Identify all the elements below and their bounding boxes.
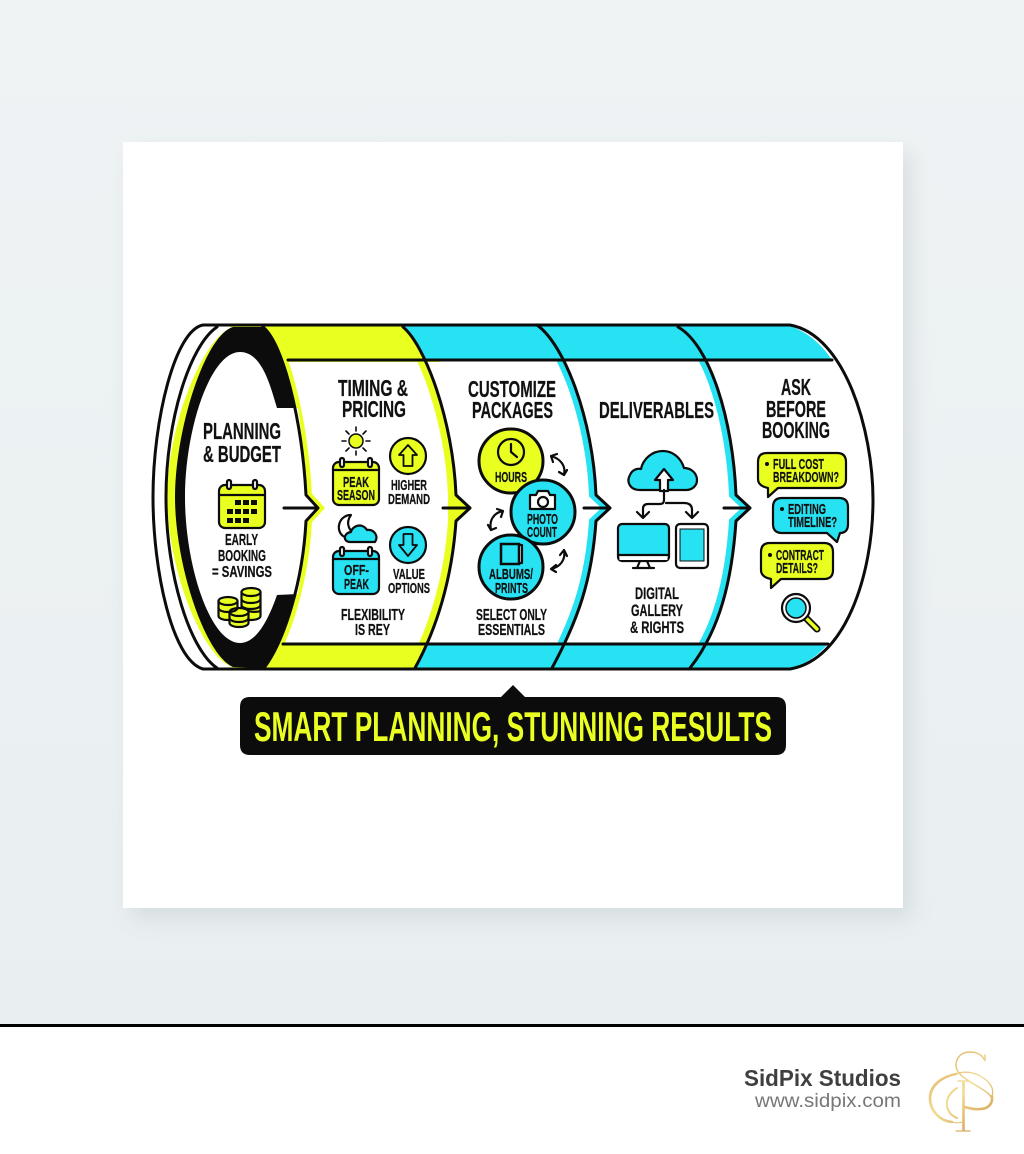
text: select only essentials: [476, 607, 547, 639]
heading: [203, 418, 281, 467]
icon: calendar: [219, 480, 265, 528]
panel: ask before booking: [758, 374, 848, 629]
text: flexibility: [341, 607, 405, 639]
heading: DELIVERABLES: [599, 397, 714, 423]
icon: sun: [342, 427, 370, 455]
heading: PRICING: [342, 396, 406, 422]
banner: [240, 685, 786, 755]
icon: swap arrows: [488, 454, 567, 572]
icon: off-peak calendar: [333, 547, 379, 594]
text: early booking: [212, 532, 272, 581]
icon: coins: [218, 588, 260, 627]
circle: albums and prints: [479, 535, 543, 599]
text: digital gallery: GALLERY: [631, 601, 683, 620]
text: higher demand: HIGHER: [391, 478, 427, 494]
panel: timing and pricing: [333, 375, 430, 639]
cyan top band: [403, 326, 832, 360]
text: flexibility: FLEXIBILITY: [341, 607, 405, 624]
band rules: [283, 360, 832, 644]
text: select only essentials: ESSENTIALS: [478, 622, 545, 639]
icon: up arrow circle: [390, 438, 426, 474]
icon: cloud upload: [628, 451, 697, 491]
opening of the ring: [185, 352, 318, 643]
arrow: stage 2 to 3: [443, 506, 468, 510]
yellow top and bottom band: [230, 326, 440, 668]
circle: hours: HOURS: [495, 470, 527, 486]
heading: ASK: [781, 374, 811, 400]
arrow: stage 1 to 2: [284, 506, 316, 510]
circle: albums and prints: ALBUMS/: [489, 567, 533, 583]
icon: split arrows: [637, 490, 698, 518]
heading: TIMING &: [338, 375, 408, 401]
footer: [0, 1024, 1024, 1154]
callout: editing timeline: EDITING: [788, 502, 826, 518]
card shadow: [131, 152, 911, 918]
divider two: [537, 325, 610, 668]
icon: peak season calendar: [333, 458, 379, 505]
panel: deliverables: [599, 397, 714, 637]
text: higher demand: DEMAND: [388, 492, 430, 508]
outer white rim and body: [153, 325, 873, 669]
heading: [762, 374, 830, 443]
callout: contract details: [761, 543, 833, 588]
circle: hours: [479, 429, 543, 493]
text: early booking: BOOKING: [218, 548, 266, 565]
logo monogram: [930, 1052, 993, 1131]
heading: [338, 375, 408, 422]
callout: editing timeline: TIMELINE?: [788, 515, 837, 531]
website: www.sidpix.com: [754, 1091, 901, 1112]
icon: monitor: [618, 524, 669, 568]
panel: customize packages: [468, 376, 575, 639]
text: early booking: EARLY: [225, 532, 258, 549]
colour strips beside dividers: [280, 362, 746, 643]
arrow: stage 4 to 5: [724, 506, 748, 510]
text: digital gallery: & RIGHTS: [630, 618, 684, 637]
icon: magnifier: [782, 594, 817, 629]
heading: [468, 376, 556, 423]
heading: & BUDGET: [203, 441, 281, 467]
callout: full cost: BREAKDOWN?: [773, 470, 839, 486]
text: select only essentials: SELECT ONLY: [476, 607, 547, 624]
text: early booking: = SAVINGS: [212, 564, 272, 581]
heading: BEFORE: [766, 396, 826, 422]
divider at the ring: [263, 327, 318, 668]
text: digital gallery: DIGITAL: [635, 584, 679, 603]
yellow rim crescent: [167, 327, 233, 667]
icon: off-peak calendar: OFF-: [344, 563, 369, 579]
text: digital gallery: [630, 584, 684, 637]
circle: albums and prints: PRINTS: [495, 581, 528, 597]
brand name: SidPix Studios: [744, 1065, 901, 1091]
outlines: [153, 325, 873, 669]
panel: planning and budget: [203, 418, 281, 627]
icon: down arrow circle: [390, 527, 426, 563]
text: value options: VALUE: [393, 567, 425, 583]
circle: photo count: COUNT: [527, 525, 557, 541]
circle: photo count: [511, 480, 575, 544]
heading: BOOKING: [762, 417, 830, 443]
callout: full cost: FULL COST: [773, 457, 824, 473]
text: value options: OPTIONS: [388, 581, 430, 597]
icon: off-peak calendar: PEAK: [344, 577, 369, 593]
callout: full cost: [758, 453, 846, 497]
divider one: [403, 327, 470, 668]
arrow: stage 3 to 4: [584, 506, 608, 510]
divider three: [678, 327, 750, 668]
text: flexibility: IS REY: [355, 622, 390, 639]
icon: moon and cloud: [339, 515, 376, 542]
black ring: [175, 327, 307, 668]
callout: editing timeline: [773, 498, 848, 542]
circle: photo count: PHOTO: [527, 512, 558, 528]
heading: CUSTOMIZE: [468, 376, 556, 402]
icon: tablet: [676, 524, 708, 568]
text: value options: [388, 567, 430, 597]
cyan bottom band: [415, 644, 828, 668]
heading: PACKAGES: [472, 397, 553, 423]
callout: contract details: CONTRACT: [776, 548, 824, 564]
card: [123, 142, 903, 908]
text: higher demand: [388, 478, 430, 508]
icon: peak season calendar: SEASON: [337, 488, 375, 504]
inner rim line: [166, 327, 217, 668]
heading: PLANNING: [203, 418, 281, 444]
icon: peak season calendar: PEAK: [343, 475, 369, 491]
cylinder body: [153, 325, 873, 669]
callout: contract details: DETAILS?: [776, 561, 818, 577]
